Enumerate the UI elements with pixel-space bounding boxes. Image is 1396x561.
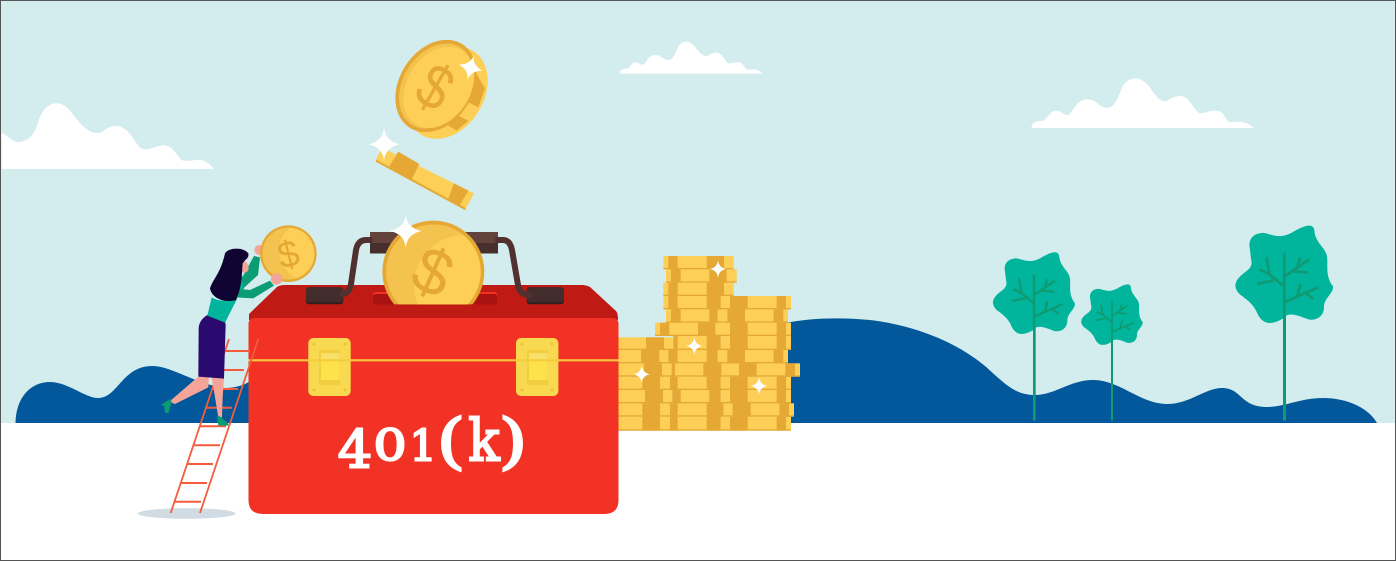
handle clasp: right <box>527 287 564 304</box>
hill: right <box>785 318 1377 423</box>
cloud: left <box>2 103 214 169</box>
label: 401(k): 0 <box>373 421 407 471</box>
handle bar <box>370 232 498 254</box>
label: 401(k): ) <box>498 407 528 477</box>
coin: in hands: $ <box>273 231 304 277</box>
sky <box>0 0 1396 423</box>
label: 401(k): k <box>468 408 500 475</box>
tree: right <box>1235 226 1333 421</box>
handle arms <box>342 240 530 295</box>
coin: falling on edge <box>376 147 474 210</box>
toolbox lid <box>249 285 618 320</box>
handle clasp: left <box>306 287 343 304</box>
stacked coins <box>618 256 800 431</box>
strap line <box>248 359 618 361</box>
label: 401(k) <box>338 407 528 480</box>
toolbox body <box>248 318 618 514</box>
cloud: right <box>1031 78 1253 128</box>
label: 401(k): ( <box>436 407 466 477</box>
sparkle: slot coin <box>390 214 422 248</box>
toolbox slot <box>373 292 497 304</box>
person and coin <box>160 225 317 426</box>
coin: entering slot <box>382 220 484 304</box>
label: 401(k): 1 <box>409 422 437 472</box>
hill: left <box>16 366 250 423</box>
ground shadow <box>138 508 236 519</box>
sparkle: stack 2 <box>686 337 702 355</box>
woman <box>161 249 282 426</box>
latch: right <box>516 338 558 396</box>
tree: middle <box>1081 284 1143 421</box>
cloud: top centre <box>619 42 763 74</box>
coin: entering slot: $ <box>402 231 464 312</box>
coin: in hands <box>260 225 317 282</box>
ground <box>0 423 1396 561</box>
label: 401(k): 4 <box>338 420 372 480</box>
sparkle: stack 3 <box>634 365 650 383</box>
coin: falling top <box>379 25 504 154</box>
ladder <box>171 339 258 513</box>
coin: falling top: $ <box>404 50 465 125</box>
sparkle: top coin <box>456 52 486 83</box>
sparkle: stack 4 <box>751 377 767 395</box>
sparkle: edge coin <box>368 127 400 161</box>
sparkle: stack 1 <box>710 260 726 278</box>
tree: left <box>993 252 1075 421</box>
hand: raised <box>254 245 264 255</box>
latch: left <box>308 338 351 396</box>
